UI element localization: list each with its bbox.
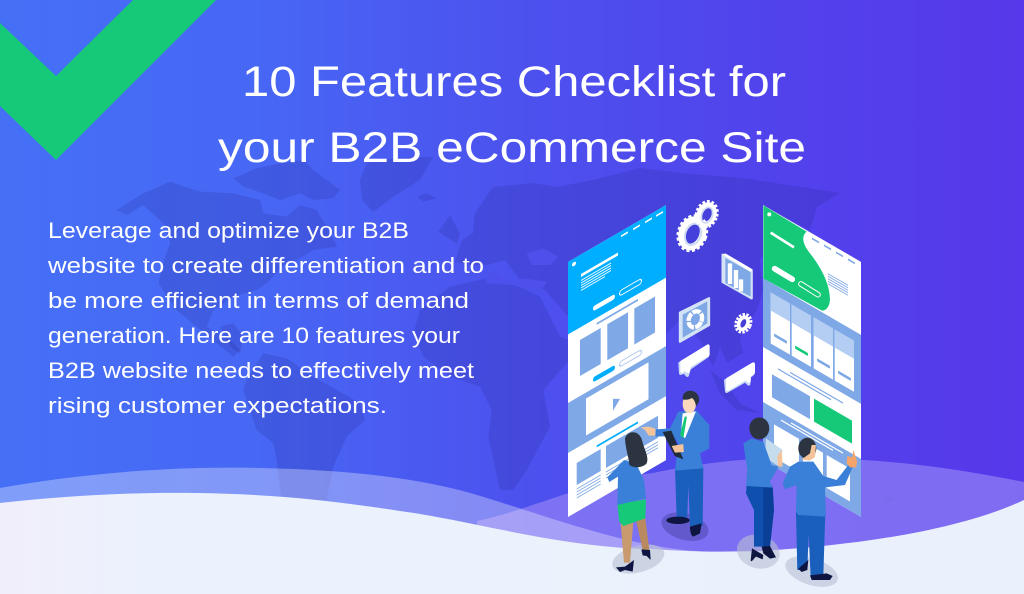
right panel white base (763, 205, 861, 517)
map: New Zealand (852, 493, 897, 525)
left panel bottom content (577, 410, 658, 498)
intro paragraph (47, 218, 484, 418)
translucent wave: left band (0, 468, 720, 594)
icon: speech bubble two (726, 364, 753, 391)
right panel feature blocks (772, 361, 852, 444)
right panel top nav and text (812, 238, 855, 299)
floating icons (673, 198, 753, 391)
icon: large gear (673, 212, 711, 255)
left panel three columns (580, 289, 655, 376)
left webpage panel (568, 205, 666, 517)
icon: small gear (692, 198, 721, 230)
right panel bottom band (763, 402, 861, 517)
woman holding tablet (733, 417, 784, 573)
icon: bar chart tile (723, 253, 753, 298)
map: Central America (220, 323, 243, 353)
title (218, 58, 806, 172)
map: Greenland (360, 157, 433, 212)
map: British Isles (438, 215, 460, 243)
light foreground wave (0, 493, 1024, 594)
map: Iceland (417, 193, 437, 202)
map: Southeast Asia islands (710, 370, 760, 413)
icon: cog (733, 312, 753, 334)
translucent wave: back right (477, 458, 1024, 594)
man with clipboard (641, 391, 712, 546)
left panel video band (568, 346, 666, 453)
man with raised hand (782, 438, 857, 593)
world map (117, 157, 897, 525)
map: South America (243, 353, 365, 500)
black sea and mediterranean gaps (485, 248, 558, 293)
left panel hero section (568, 205, 666, 334)
map: North America (117, 182, 337, 357)
title: 10 Features Checklist for (242, 58, 786, 106)
intro paragraph: Leverage and optimize your B2B (48, 218, 409, 243)
intro paragraph: website to create differentiation and to (47, 253, 484, 278)
right panel pricing band (763, 278, 861, 404)
intro paragraph: rising customer expectations. (48, 393, 387, 418)
map: Africa (413, 278, 577, 490)
title: your B2B eCommerce Site (218, 124, 806, 172)
checkmark (0, 0, 216, 160)
intro paragraph: be more efficient in terms of demand (48, 288, 469, 313)
intro paragraph: generation. Here are 10 features your (48, 323, 460, 348)
map: Eurasia (455, 168, 840, 367)
left panel white base (568, 205, 666, 517)
map: Arctic islands (233, 160, 340, 200)
intro paragraph: B2B website needs to effectively meet (48, 358, 474, 383)
woman in green skirt (607, 432, 668, 579)
left panel buttons (593, 349, 642, 382)
people (607, 391, 857, 593)
right panel green hero (763, 205, 830, 311)
icon: speech bubble one (680, 346, 708, 375)
icon: donut tile (680, 298, 709, 342)
right webpage panel (763, 205, 861, 517)
